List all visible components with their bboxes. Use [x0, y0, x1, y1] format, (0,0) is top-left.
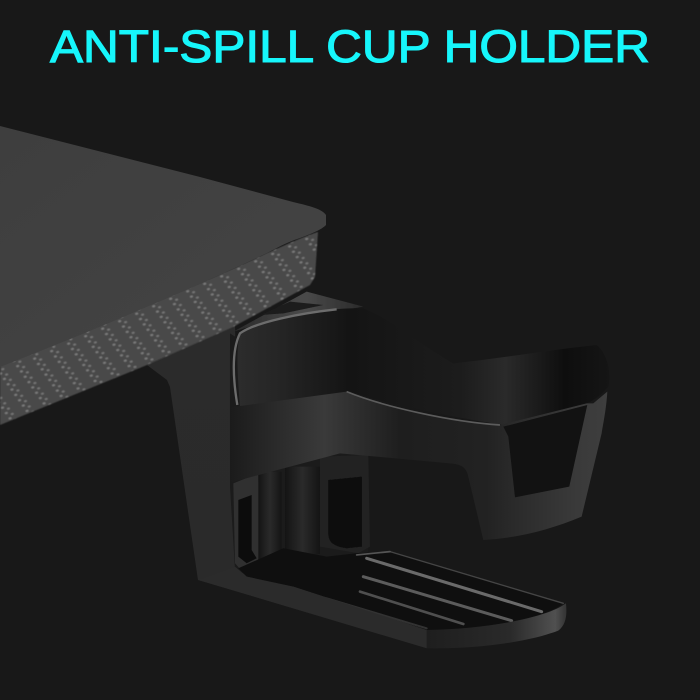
- left slot: [238, 495, 257, 563]
- post two: [285, 467, 320, 554]
- post three recess: [328, 477, 362, 548]
- cup ring inner wall: [237, 308, 609, 425]
- back plate: [230, 333, 368, 590]
- desk leg bracket: [147, 325, 427, 648]
- cup holder: [198, 292, 609, 648]
- tray floor: [238, 548, 563, 630]
- post one: [258, 472, 282, 560]
- desk corner: [0, 126, 326, 425]
- mount plate under desk: [233, 292, 363, 332]
- band top edge highlight: [347, 392, 500, 425]
- tray ribs: [327, 552, 563, 628]
- title: ANTI-SPILL CUP HOLDER: [50, 21, 650, 72]
- tray front rim: [427, 603, 566, 648]
- cup ring rim highlight: [234, 309, 337, 405]
- post three: [320, 455, 370, 553]
- desk top surface: [0, 126, 326, 367]
- cup ring outer band: [230, 392, 607, 540]
- left slot frame: [233, 473, 273, 577]
- carbon fibre edge: [0, 232, 318, 425]
- mount plate dark slit: [260, 302, 323, 315]
- tray stem: [198, 567, 427, 648]
- cup window: [503, 405, 587, 497]
